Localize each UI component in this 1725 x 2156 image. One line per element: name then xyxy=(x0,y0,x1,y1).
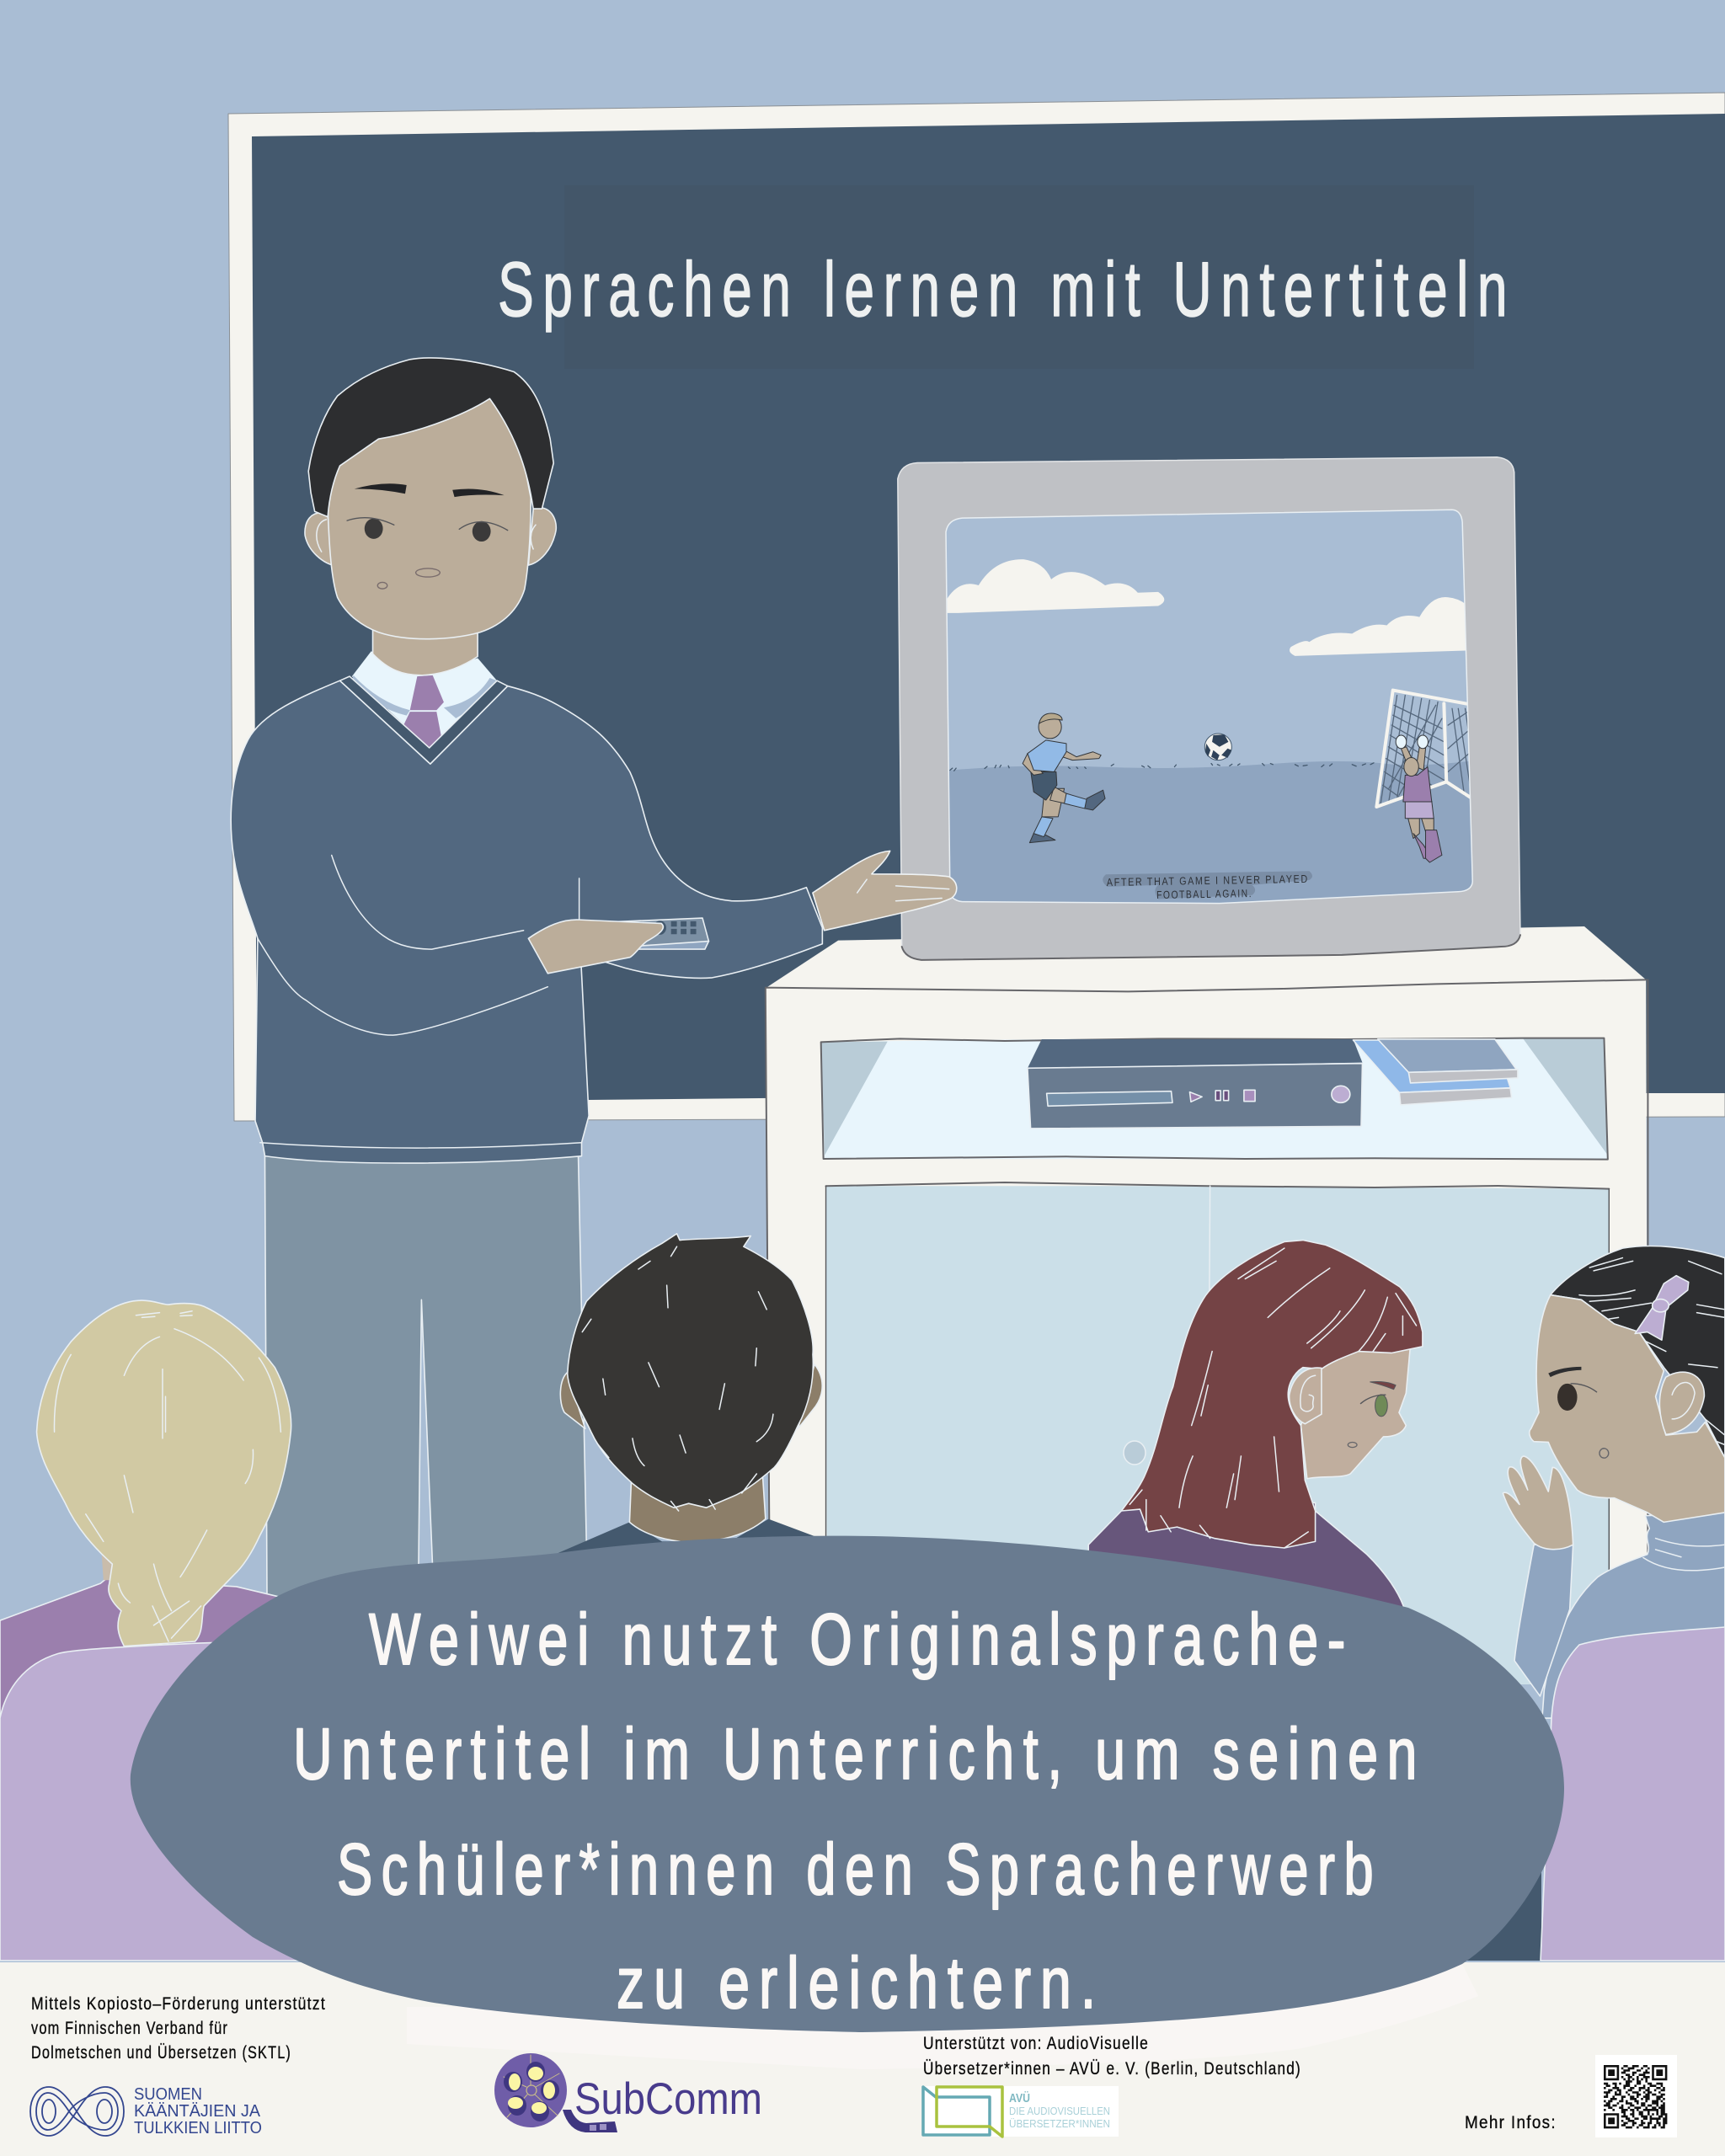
subtitle caption: FOOTBALL AGAIN. xyxy=(1156,887,1252,901)
teacher xyxy=(231,358,957,1163)
hair strands xyxy=(1579,1258,1725,1445)
hair strands xyxy=(582,1246,773,1511)
TV screen xyxy=(933,502,1489,912)
books xyxy=(1353,1039,1518,1105)
tie xyxy=(402,675,444,748)
footer band xyxy=(0,1962,1725,2156)
title panel xyxy=(498,185,1516,369)
cabinet body xyxy=(766,926,1648,1684)
cabinet doors xyxy=(826,1182,1610,1684)
shelf niche xyxy=(821,1038,1608,1160)
face xyxy=(1530,1295,1725,1522)
TV casing xyxy=(898,457,1520,960)
logo: SKTL: KÄÄNTÄJIEN JA xyxy=(134,2102,261,2121)
funding note xyxy=(31,1994,326,2063)
hair xyxy=(1121,1241,1423,1548)
more info label: Mehr Infos: xyxy=(1465,2113,1557,2132)
hair strands xyxy=(1130,1248,1417,1548)
collar band xyxy=(340,676,508,764)
sweater details xyxy=(258,855,581,1148)
shirt xyxy=(0,1578,284,1718)
logo: SubComm: SubComm xyxy=(574,2074,762,2124)
shirt xyxy=(1088,1497,1404,1664)
bubble text: Schüler*innen den Spracherwerb xyxy=(337,1829,1382,1910)
footer highlight swoosh xyxy=(407,1964,1478,2069)
logo: SKTL xyxy=(30,2085,262,2137)
logo: SubComm xyxy=(494,2053,762,2132)
cloud left xyxy=(945,559,1164,613)
hand xyxy=(1503,1456,1573,1550)
bubble text: zu erleichtern. xyxy=(617,1943,1105,2024)
turtleneck lines xyxy=(1643,1539,1725,1571)
left student xyxy=(0,1300,366,1961)
bubble text xyxy=(293,1599,1426,2024)
red-haired student xyxy=(1088,1241,1423,1664)
ear xyxy=(1659,1372,1704,1434)
ears xyxy=(305,508,556,565)
blackboard xyxy=(228,93,1725,1121)
support note xyxy=(923,2034,1301,2079)
QR code xyxy=(1595,2055,1677,2137)
neck xyxy=(102,1555,118,1580)
funding note: Dolmetschen und Übersetzen (SKTL) xyxy=(31,2043,291,2063)
nose and mouth xyxy=(377,568,440,589)
eyes xyxy=(347,518,508,542)
hair xyxy=(1551,1246,1725,1458)
logo: SKTL: TULKKIEN LIITTO xyxy=(134,2119,262,2137)
shirt xyxy=(558,1519,815,1632)
door knob xyxy=(1124,1441,1146,1465)
shirt collar xyxy=(352,651,497,748)
eyebrow and eye xyxy=(1348,1381,1396,1448)
neck xyxy=(629,1474,766,1542)
face xyxy=(328,385,531,639)
kicker xyxy=(1023,713,1105,843)
icon: film reel xyxy=(494,2053,617,2132)
grass tufts xyxy=(950,763,1374,771)
pointing hand xyxy=(813,851,957,931)
logo: AVÜ: ÜBERSETZER*INNEN xyxy=(1009,2117,1110,2130)
cloud right xyxy=(1290,597,1477,656)
icon: interlaced loops xyxy=(30,2087,124,2136)
middle student xyxy=(558,1234,822,1632)
support note: Unterstützt von: AudioVisuelle xyxy=(923,2034,1149,2053)
cabinet xyxy=(766,926,1648,1684)
icon: overlapping frames xyxy=(923,2087,1002,2137)
bubble text: Weiwei nutzt Originalsprache- xyxy=(369,1599,1354,1680)
DVD player xyxy=(1028,1039,1362,1129)
subtitle caption xyxy=(1107,873,1309,902)
goalkeeper xyxy=(1396,735,1442,862)
sweater xyxy=(231,680,822,1163)
eyebrow and eye xyxy=(1548,1367,1609,1458)
remote control xyxy=(601,918,708,949)
football xyxy=(1204,734,1231,760)
lilac back xyxy=(0,1638,366,1961)
neck xyxy=(373,622,478,675)
whispering student xyxy=(1503,1246,1725,1718)
funding note: vom Finnischen Verband für xyxy=(31,2019,228,2038)
subtitle background xyxy=(1103,871,1312,899)
logo: AVÜ: AVÜ xyxy=(1009,2091,1030,2105)
sleeve xyxy=(1514,1545,1573,1696)
trousers xyxy=(264,1148,586,1632)
hair xyxy=(568,1234,813,1508)
sweater body xyxy=(1542,1513,1725,1718)
face xyxy=(1300,1348,1410,1479)
ears xyxy=(560,1364,822,1428)
hair strands xyxy=(54,1311,280,1641)
hair xyxy=(308,358,553,517)
right student lilac back xyxy=(1541,1627,1725,1961)
sweater of right student, lower part xyxy=(1381,1769,1541,1961)
support note: Übersetzer*innen – AVÜ e. V. (Berlin, Deutschland) xyxy=(923,2059,1301,2079)
television xyxy=(898,457,1520,960)
goal xyxy=(1376,691,1475,807)
hand holding remote xyxy=(528,920,663,974)
funding note: Mittels Kopiosto–Förderung unterstützt xyxy=(31,1994,326,2014)
ear xyxy=(1290,1368,1322,1424)
logo: AVÜ: DIE AUDIOVISUELLEN xyxy=(1009,2105,1110,2117)
logo: AVÜ xyxy=(923,2086,1119,2137)
blonde hair and braid xyxy=(37,1300,291,1646)
speech bubble xyxy=(131,1536,1564,2032)
eyebrows xyxy=(355,483,505,497)
hair bow xyxy=(1635,1276,1689,1340)
subtitle caption: AFTER THAT GAME I NEVER PLAYED xyxy=(1107,873,1309,889)
logo: SKTL: SUOMEN xyxy=(134,2085,202,2104)
